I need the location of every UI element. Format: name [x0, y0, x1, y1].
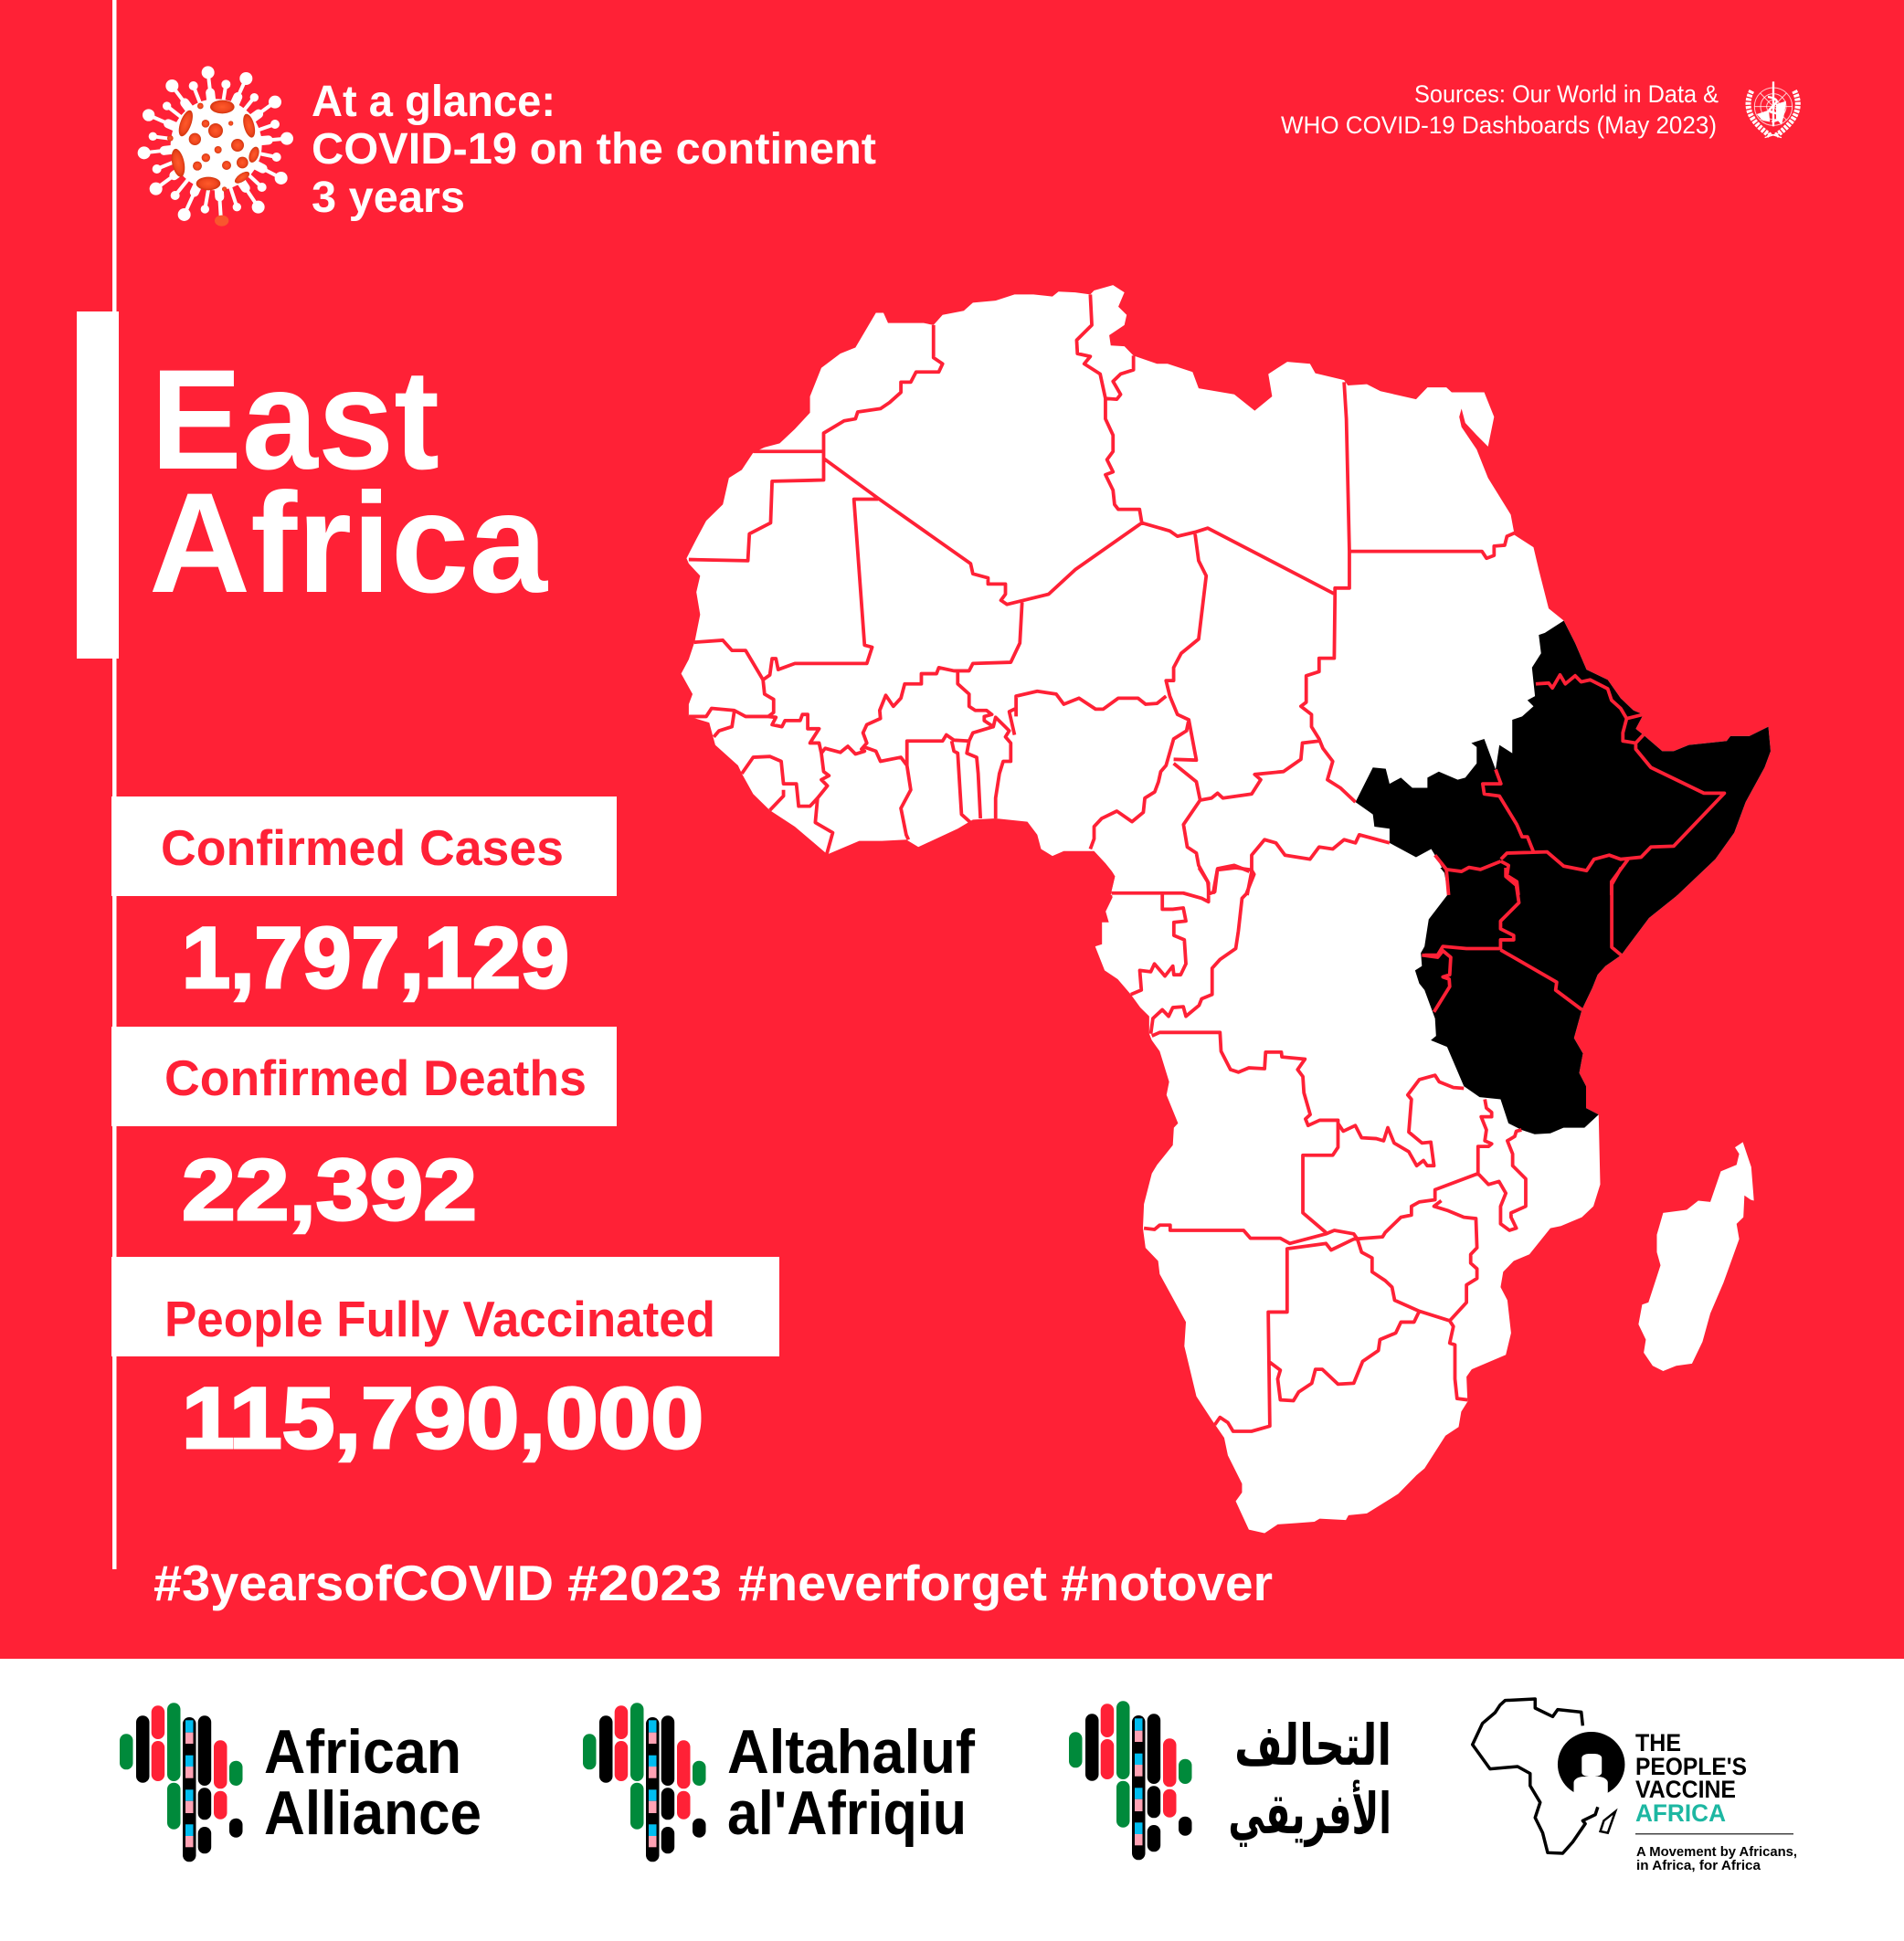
- map of Africa: [682, 285, 1771, 1533]
- header title: [312, 78, 876, 222]
- header title: 3 years: [312, 174, 465, 222]
- hashtags: [153, 1555, 1273, 1611]
- vertical white rule: [112, 0, 117, 1569]
- header title: COVID-19 on the continent: [312, 125, 876, 174]
- stat: confirmed deaths: 22,392: [182, 1142, 477, 1239]
- sources note: [1281, 80, 1719, 139]
- logo: The People's Vaccine Africa: in Africa, for Africa: [1636, 1858, 1761, 1873]
- logo: The People's Vaccine Africa: PEOPLE'S: [1635, 1753, 1747, 1780]
- hashtags: #2023: [567, 1555, 722, 1611]
- region heading: East: [151, 341, 439, 500]
- map: Madagascar: [1638, 1142, 1754, 1371]
- map: northern borders: [689, 294, 1724, 895]
- logo: Arabic African Alliance: التحالف: [1234, 1713, 1391, 1778]
- map: southern land: [1095, 868, 1754, 1533]
- region heading: [149, 341, 548, 623]
- map: northern land: [682, 285, 1771, 895]
- sources note: Sources: Our World in Data &: [1414, 80, 1719, 108]
- stat: confirmed cases: Confirmed Cases: [161, 819, 564, 876]
- header title: At a glance:: [312, 78, 555, 126]
- stat: confirmed cases: [111, 796, 617, 1007]
- logo: The People's Vaccine Africa: [1473, 1699, 1797, 1873]
- hashtags: #neverforget: [738, 1555, 1047, 1611]
- logo: The People's Vaccine Africa: THE: [1635, 1729, 1681, 1756]
- logo: The People's Vaccine Africa: AFRICA: [1635, 1799, 1726, 1827]
- map: East Africa highlighted south: [1415, 868, 1704, 1134]
- region heading: Africa: [149, 464, 548, 623]
- hashtags: #3yearsofCOVID: [153, 1555, 554, 1611]
- logo: African Alliance: [120, 1703, 481, 1862]
- logo: The People's Vaccine Africa: VACCINE: [1635, 1776, 1736, 1803]
- sources note: WHO COVID-19 Dashboards (May 2023): [1281, 111, 1717, 139]
- logo: Arabic African Alliance: الأفريقي: [1228, 1779, 1391, 1847]
- logo: African Alliance: Alliance: [264, 1778, 481, 1848]
- logo: The People's Vaccine Africa: A Movement by Africans,: [1636, 1844, 1797, 1860]
- stat: people fully vaccinated: 115,790,000: [182, 1370, 703, 1467]
- map: East Africa highlighted north: [1356, 621, 1771, 895]
- logo: African Alliance: African: [264, 1717, 461, 1787]
- logo: Altahaluf al'Afriqiu: [583, 1703, 975, 1862]
- stat: people fully vaccinated: People Fully Vaccinated: [164, 1291, 715, 1347]
- hashtags: #notover: [1061, 1555, 1273, 1611]
- stat: confirmed cases: 1,797,129: [182, 910, 569, 1007]
- logo: Altahaluf al'Afriqiu: al'Afriqiu: [727, 1778, 967, 1848]
- white footer band: [0, 1659, 1904, 1941]
- stat: confirmed deaths: [111, 1027, 617, 1239]
- logo: Altahaluf al'Afriqiu: Altahaluf: [727, 1717, 975, 1787]
- map: southern borders: [1112, 868, 1621, 1431]
- stat: people fully vaccinated: [111, 1257, 779, 1467]
- icon: WHO emblem: [1749, 81, 1798, 138]
- icon: coronavirus: [138, 66, 293, 227]
- stat: confirmed deaths: Confirmed Deaths: [164, 1050, 587, 1106]
- white accent bar: [77, 311, 119, 659]
- logo: Arabic African Alliance: [1069, 1701, 1391, 1860]
